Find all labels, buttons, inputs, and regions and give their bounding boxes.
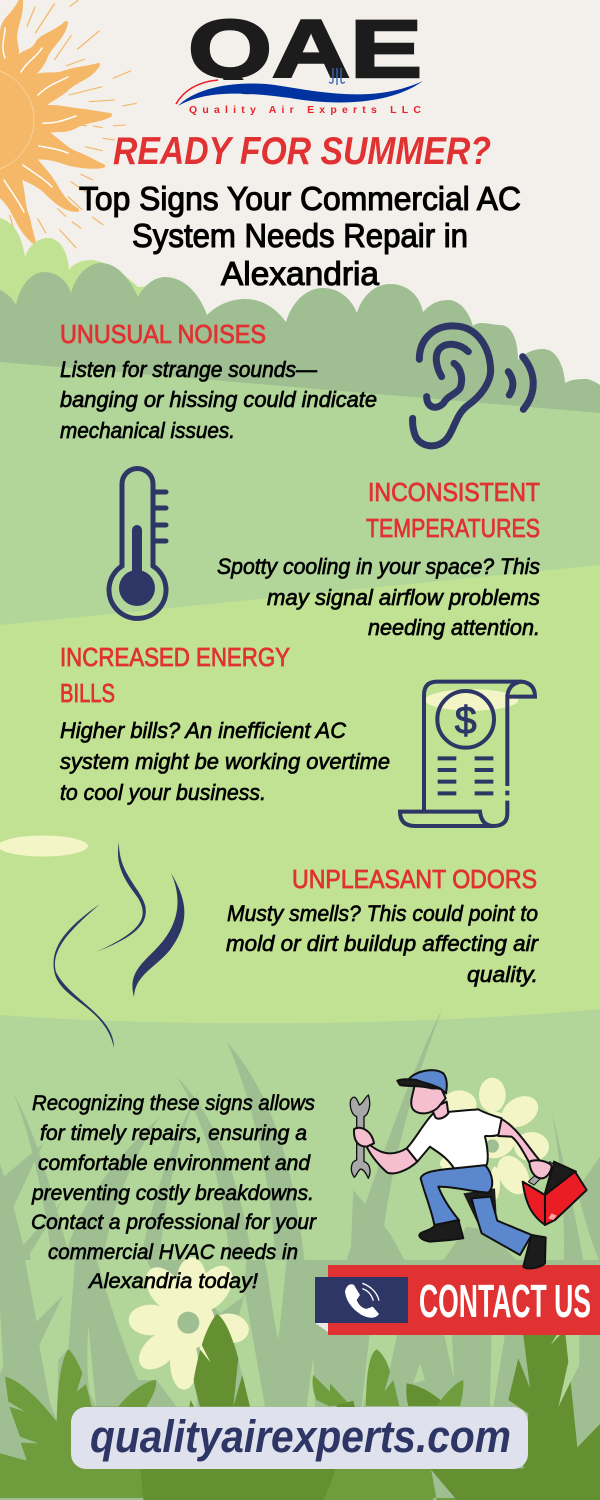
title: System Needs Repair in	[132, 217, 468, 254]
front arm	[367, 1145, 417, 1173]
panel: inconsistent temperatures: TEMPERATURES	[366, 513, 540, 543]
panel: increased energy bills	[60, 642, 390, 805]
face	[411, 1083, 446, 1113]
heading: ready for summer: READY FOR SUMMER?	[113, 130, 491, 173]
conclusion text: for timely repairs, ensuring a	[40, 1121, 307, 1145]
panel: unusual noises: banging or hissing could indicate	[60, 387, 377, 412]
panel: unusual noises: Listen for strange sounds—	[60, 357, 317, 382]
panel: unpleasant odors: Musty smells? This could point to	[227, 901, 538, 926]
conclusion text: Contact a professional for your	[31, 1210, 317, 1234]
title: Alexandria	[221, 255, 380, 292]
logo	[176, 4, 423, 116]
panel: unusual noises: UNUSUAL NOISES	[60, 319, 266, 349]
flower behind technician	[440, 1078, 549, 1200]
left hand	[354, 1128, 374, 1147]
icon: odor wisps	[53, 842, 184, 1048]
panel: unpleasant odors: UNPLEASANT ODORS	[292, 864, 537, 894]
button: contact us	[315, 1265, 600, 1335]
icon: bill	[400, 682, 535, 826]
logo: Quality Air Experts LLC	[189, 104, 421, 116]
background grass blades right	[343, 1010, 600, 1270]
panel: increased energy bills: BILLS	[60, 678, 115, 708]
panel: inconsistent temperatures: may signal airflow problems	[267, 585, 540, 610]
rear leg	[463, 1188, 497, 1228]
panel: unpleasant odors: quality.	[467, 962, 538, 987]
shoes	[419, 1220, 463, 1242]
icon: phone	[345, 1283, 379, 1318]
panel: unpleasant odors: mold or dirt buildup affecting air	[226, 931, 539, 956]
toolbox	[545, 1162, 576, 1197]
wrench	[350, 1095, 370, 1178]
website pill: qualityairexperts.com	[90, 1411, 511, 1462]
panel: unpleasant odors	[226, 864, 539, 987]
back arm	[498, 1118, 539, 1165]
conclusion text: commercial HVAC needs in	[48, 1240, 298, 1264]
foreground leaves right	[140, 1330, 600, 1500]
neck	[432, 1102, 448, 1119]
conclusion text: Recognizing these signs allows	[32, 1091, 315, 1115]
shirt	[407, 1109, 502, 1168]
icon: ear	[413, 326, 533, 446]
panel: inconsistent temperatures: INCONSISTENT	[368, 477, 540, 507]
panel: increased energy bills: to cool your business.	[60, 780, 266, 805]
logo: QAE	[188, 4, 422, 95]
panel: increased energy bills: Higher bills? An inefficient AC	[60, 718, 347, 743]
cap	[408, 1070, 447, 1093]
panel: increased energy bills: system might be working overtime	[60, 749, 390, 774]
background grass blades left	[0, 1042, 308, 1300]
panel: inconsistent temperatures	[217, 477, 540, 640]
conclusion text: Alexandria today!	[87, 1269, 258, 1293]
icon: bill: $	[455, 698, 477, 742]
flower bottom left	[129, 1257, 251, 1390]
icon: sun	[0, 0, 137, 275]
illustration: running technician	[350, 1070, 587, 1268]
panel: unusual noises	[60, 319, 377, 443]
light grass blades lower left	[0, 1260, 315, 1420]
icon: thermometer	[109, 468, 166, 618]
conclusion text: preventing costly breakdowns.	[31, 1181, 314, 1205]
foreground leaves left	[0, 1314, 330, 1498]
panel: increased energy bills: INCREASED ENERGY	[60, 642, 290, 672]
conclusion text: comfortable environment and	[38, 1151, 311, 1175]
lower grass field	[0, 1260, 600, 1500]
panel: unusual noises: mechanical issues.	[60, 418, 235, 443]
title	[79, 180, 521, 292]
panel: inconsistent temperatures: needing attention.	[368, 615, 540, 640]
right hand	[529, 1160, 552, 1178]
title: Top Signs Your Commercial AC	[79, 180, 521, 217]
conclusion text	[31, 1091, 317, 1293]
light grass blades lower right	[362, 1330, 579, 1407]
panel: inconsistent temperatures: Spotty cooling in your space? This	[217, 554, 540, 579]
front thigh	[421, 1165, 492, 1225]
